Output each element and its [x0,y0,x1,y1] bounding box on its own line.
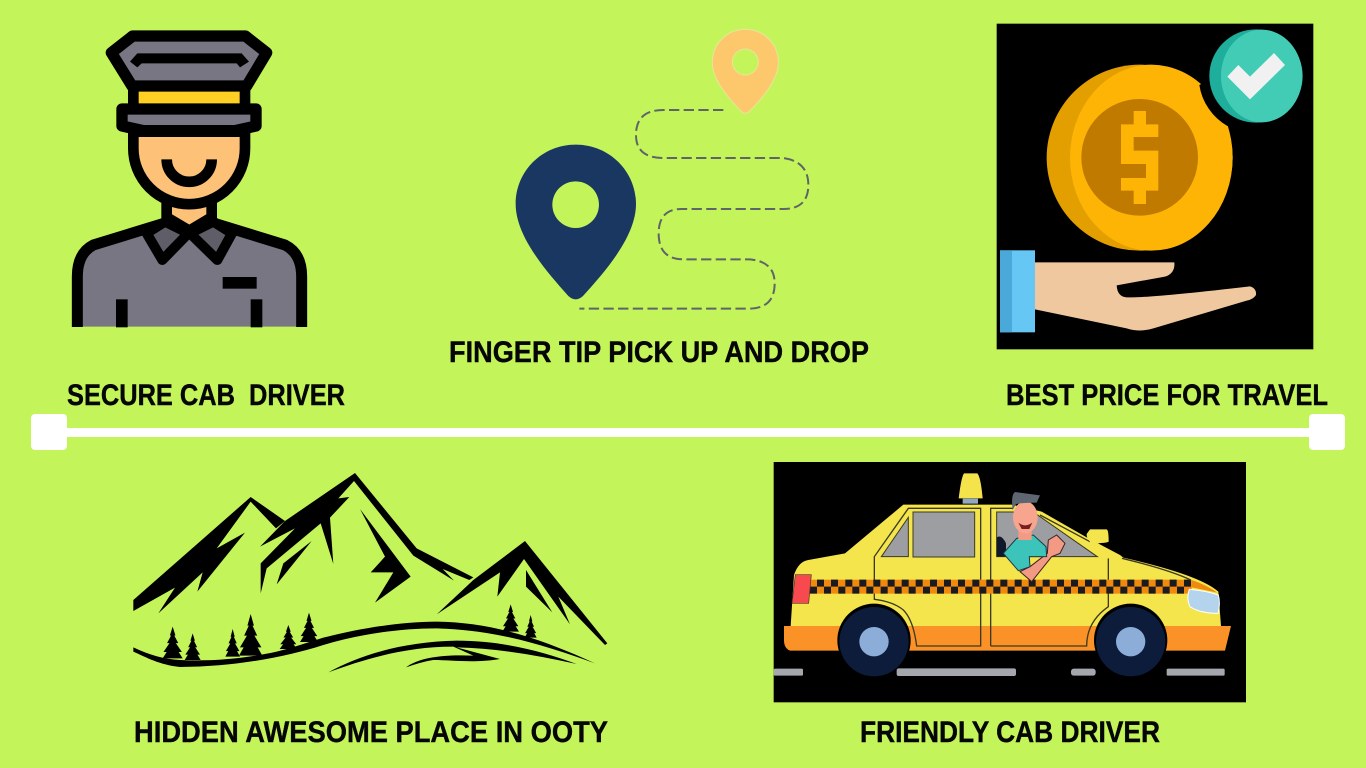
divider with end handles [31,414,1345,450]
side mirror [1087,529,1109,543]
door outlines [874,508,1108,646]
heading: friendly cab driver: FRIENDLY CAB DRIVER [860,716,1160,749]
icon: route with location pins [516,29,808,309]
icon: cab driver [77,36,302,327]
icon: yellow taxi with driver [774,462,1246,702]
icon: navy origin pin [516,145,636,299]
icon: route dashed line [579,110,808,309]
coin [1047,65,1237,251]
tail light [792,575,811,603]
icon: mountains and trees [133,473,607,672]
hand [1000,250,1256,332]
hood line [1122,558,1191,580]
heading: finger tip pick up and drop: FINGER TIP PICK UP AND DROP [449,336,869,369]
wheels [837,604,1167,677]
road markings [774,668,1225,676]
driver [997,492,1065,582]
trees [163,604,537,660]
icon: coin on hand with check badge [997,24,1313,349]
checker stripe [810,580,1217,594]
icon: orange destination pin [712,29,778,113]
car body [791,505,1221,626]
head light [1188,589,1219,613]
heading: hidden awesome place in ooty: HIDDEN AWESOME PLACE IN OOTY [134,716,608,749]
roof light [959,473,983,498]
check badge [1209,29,1303,123]
heading: secure cab driver: SECURE CAB DRIVER [67,379,345,412]
windows [881,512,1097,557]
